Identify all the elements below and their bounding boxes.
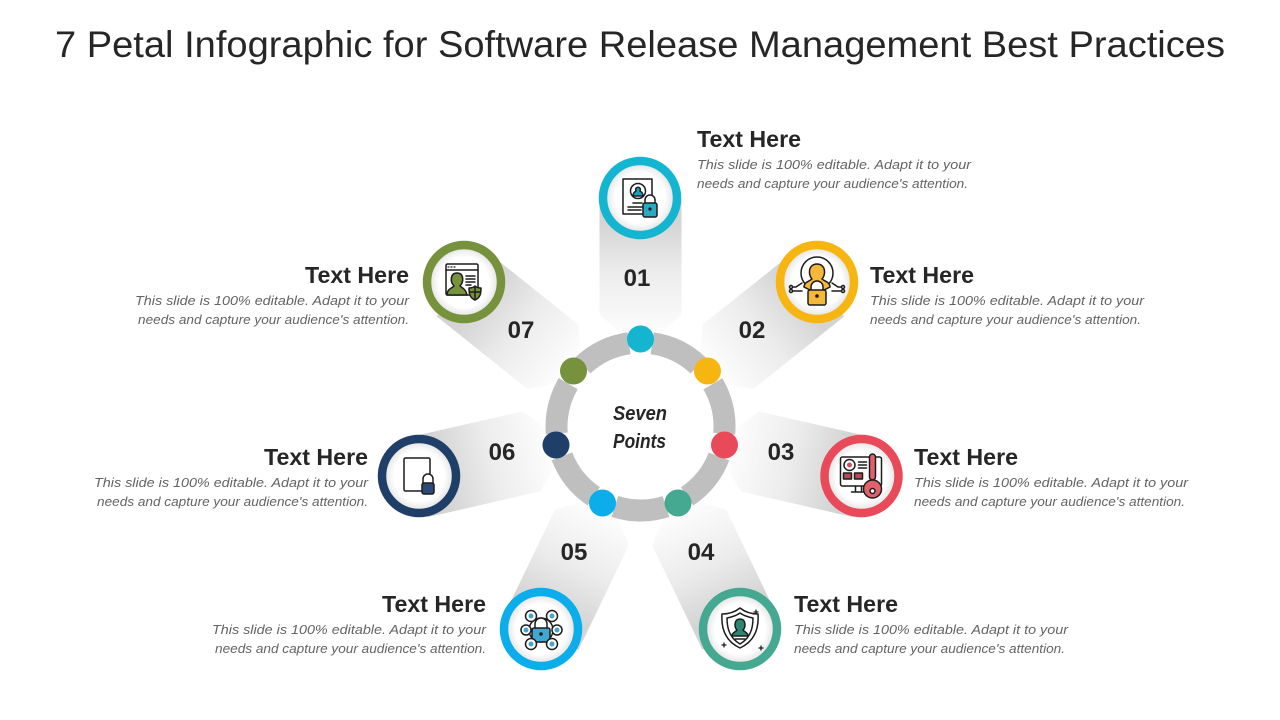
petal 07 — [437, 252, 593, 401]
icon: browser window with user and shield — [446, 264, 481, 300]
petals — [409, 198, 872, 650]
text block 04 — [794, 591, 1069, 656]
icon: person in network with lock — [790, 257, 844, 305]
text block 06 — [94, 444, 369, 509]
text block 02 — [870, 262, 1145, 327]
text block 06: Text Here — [264, 444, 368, 470]
text block 03 — [914, 444, 1189, 509]
numbers: 04 — [688, 539, 715, 566]
text block 01: This slide is 100% editable. Adapt it to your — [697, 157, 972, 172]
icon circle 03 — [824, 439, 898, 513]
numbers: 05 — [561, 539, 587, 566]
text block 03: needs and capture your audience's attention. — [914, 494, 1185, 509]
centre label: Seven — [613, 403, 667, 425]
text block 02: Text Here — [870, 262, 974, 288]
icon: blank page with lock — [404, 458, 434, 494]
title: 7 Petal Infographic for Software Release Management Best Practices — [55, 24, 1225, 65]
text block 01: Text Here — [697, 126, 801, 152]
text block 06: needs and capture your audience's attention. — [97, 494, 368, 509]
icon: monitor with key — [840, 454, 882, 498]
text block 07: needs and capture your audience's attention. — [138, 312, 409, 327]
text block 04: needs and capture your audience's attention. — [794, 641, 1065, 656]
text block 01: needs and capture your audience's attention. — [697, 176, 968, 191]
petal 03 — [722, 407, 872, 517]
centre label: Points — [613, 431, 666, 453]
text block 02: This slide is 100% editable. Adapt it to your — [870, 293, 1145, 308]
text block 06: This slide is 100% editable. Adapt it to your — [94, 475, 369, 490]
numbers: 03 — [768, 439, 794, 466]
text block 07 — [135, 262, 410, 327]
icon circle 01 — [603, 161, 677, 235]
numbers: 07 — [508, 317, 534, 344]
text block 03: Text Here — [914, 444, 1018, 470]
text block 04: Text Here — [794, 591, 898, 617]
icon: shield with person — [722, 608, 763, 650]
icon circle 06 — [382, 439, 456, 513]
numbers — [489, 265, 794, 566]
numbers: 01 — [624, 265, 650, 292]
petal 01 — [600, 198, 682, 334]
text block 05 — [212, 591, 487, 656]
petal 06 — [409, 407, 559, 517]
numbers: 06 — [489, 439, 515, 466]
icon circle 04 — [703, 592, 777, 666]
icon circle 07 — [427, 245, 501, 319]
ring dots — [542, 326, 738, 516]
text block 01 — [697, 126, 972, 191]
text block 05: Text Here — [382, 591, 486, 617]
icon circle 02 — [780, 245, 854, 319]
petal 05 — [505, 493, 637, 650]
icon: profile document with lock — [623, 179, 657, 217]
numbers: 02 — [739, 317, 765, 344]
text block 07: This slide is 100% editable. Adapt it to your — [135, 293, 410, 308]
text block 04: This slide is 100% editable. Adapt it to your — [794, 622, 1069, 637]
petal 02 — [688, 252, 844, 401]
icon: lock with connected users — [521, 610, 562, 650]
text block 05: This slide is 100% editable. Adapt it to your — [212, 622, 487, 637]
centre label — [613, 403, 667, 453]
petal 04 — [644, 493, 776, 650]
text block 02: needs and capture your audience's attention. — [870, 312, 1141, 327]
central ring — [546, 332, 735, 521]
text block 07: Text Here — [305, 262, 409, 288]
icon circle 05 — [504, 592, 578, 666]
text block 03: This slide is 100% editable. Adapt it to your — [914, 475, 1189, 490]
text block 05: needs and capture your audience's attention. — [215, 641, 486, 656]
